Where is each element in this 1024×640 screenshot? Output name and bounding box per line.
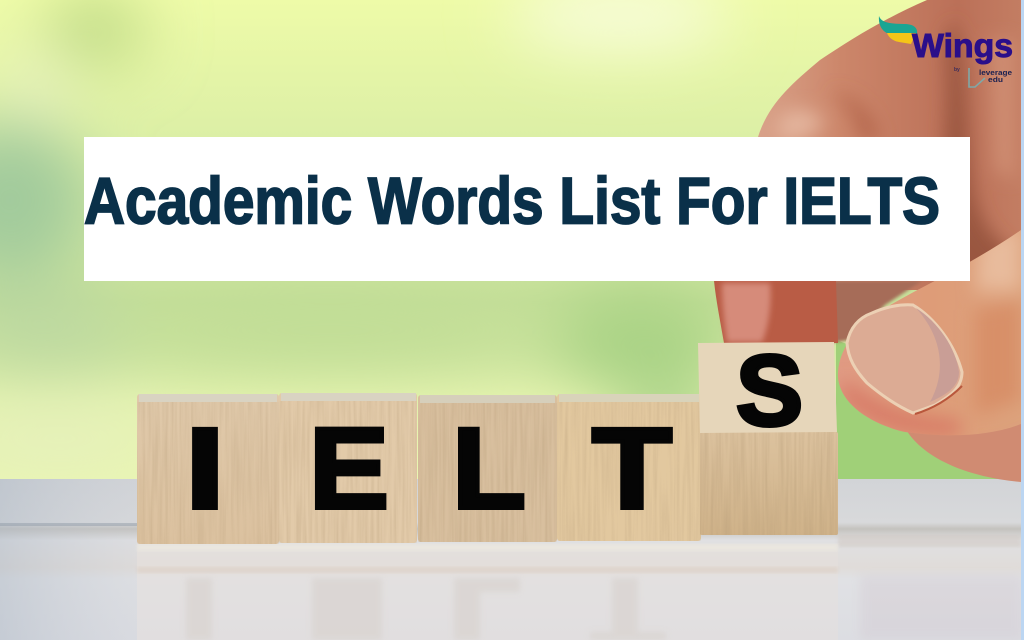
- leverage edu logo: [969, 68, 1012, 87]
- lower finger: [905, 410, 1021, 482]
- leverage edu logo: edu: [988, 75, 1003, 84]
- letter I: I: [185, 405, 225, 533]
- index fingertip: [714, 281, 838, 343]
- Wings wordmark: Wings: [912, 27, 1013, 64]
- by: by: [954, 67, 960, 73]
- upper hand and fingers: [740, 0, 1024, 290]
- block reflections: [137, 544, 838, 640]
- thumbnail: [847, 305, 962, 413]
- thumb: [830, 225, 1024, 440]
- gap between finger and thumb: [830, 281, 922, 343]
- wooden block: I: [137, 394, 279, 544]
- wooden block: E: [279, 393, 417, 543]
- letter S: S: [736, 335, 803, 447]
- letter L: L: [452, 405, 526, 533]
- leverage edu logo: leverage: [979, 68, 1012, 77]
- title panel: [84, 137, 970, 281]
- wooden block: T: [557, 394, 701, 541]
- green between thumb and table: [836, 340, 1000, 482]
- logo mark: [879, 16, 917, 44]
- logo: Wings by leverage edu: [879, 16, 1013, 87]
- table surface: [0, 479, 1024, 640]
- wooden block: L: [418, 395, 557, 542]
- wooden block: S (raised): [698, 335, 838, 535]
- hand: [714, 0, 1024, 482]
- right edge strip: [1021, 0, 1024, 640]
- letter E: E: [309, 405, 389, 533]
- letter T: T: [592, 405, 672, 533]
- blurred green background: [0, 0, 1024, 490]
